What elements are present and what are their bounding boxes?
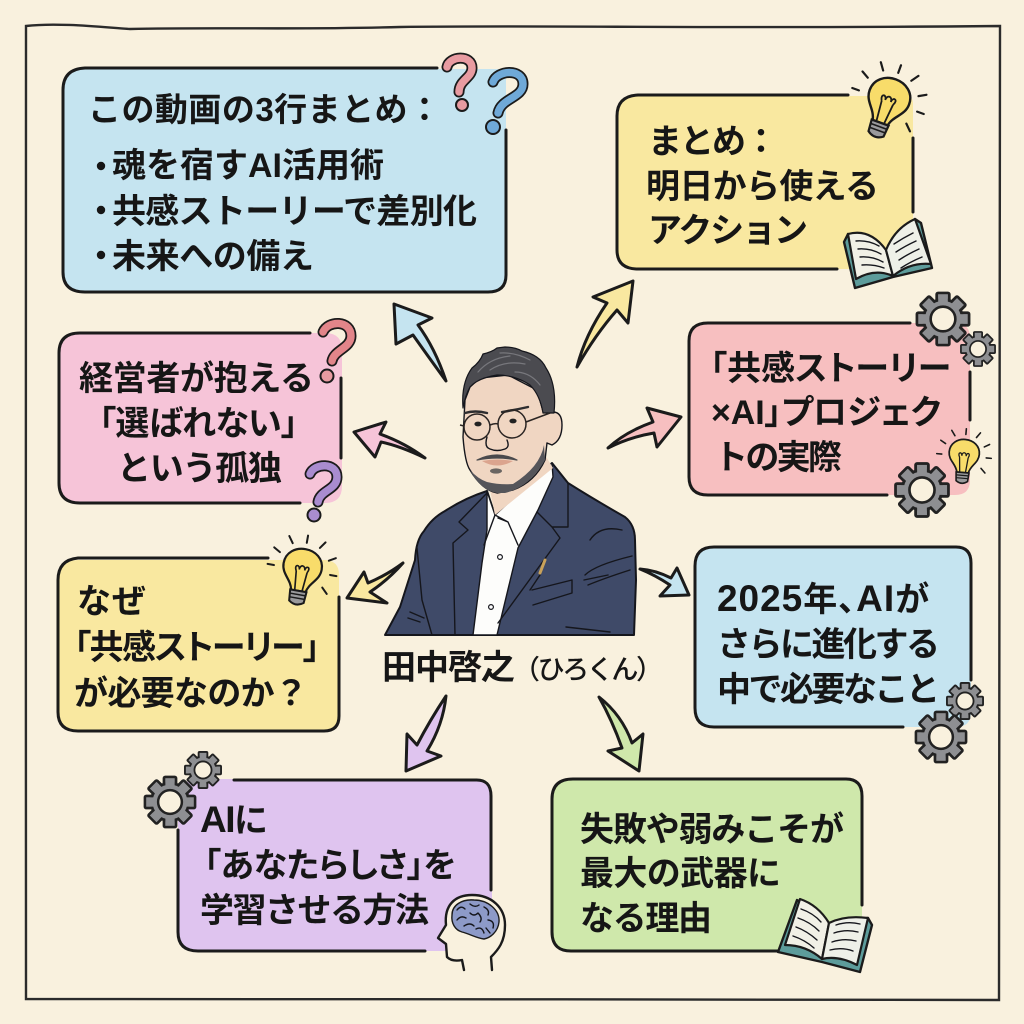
- text: lonely executives: という孤独: [117, 450, 282, 488]
- neck: [488, 455, 553, 515]
- text: project reality: [710, 350, 951, 477]
- panel: teaching AI your personality: [178, 779, 492, 951]
- arrow: to lonely executives: [354, 422, 425, 458]
- text: why empathy story: なぜ: [77, 583, 146, 621]
- text: teaching AI your personality: AIに: [200, 799, 268, 840]
- icon: blue question mark: [486, 72, 523, 134]
- icon: light bulb top right: [839, 52, 937, 150]
- arrow: to project panel: [608, 408, 681, 448]
- panel: project reality: [689, 323, 970, 495]
- text: 2025 AI evolution: さらに進化する: [717, 626, 940, 664]
- moustache: [477, 455, 517, 460]
- panel: action summary: [617, 95, 913, 269]
- list: three key points: 共感ストーリーで差別化: [112, 193, 477, 231]
- text: failure as a weapon: なる理由: [580, 900, 712, 938]
- face: [463, 375, 562, 493]
- icon: coral question mark: [447, 58, 472, 111]
- panel: failure as a weapon: [552, 779, 862, 952]
- text: lonely executives: 経営者が抱える: [79, 359, 314, 398]
- name label: [382, 649, 663, 687]
- arrow: to 2025 panel: [640, 568, 689, 596]
- text: project reality: トの実際: [714, 439, 842, 477]
- text: failure as a weapon: 最大の武器に: [580, 855, 781, 893]
- text: 2025 AI evolution: 中で必要なこと: [717, 671, 940, 709]
- name label: （ひろくん）: [513, 655, 663, 685]
- panel: lonely executives: [59, 333, 342, 503]
- text: action summary: まとめ：: [648, 123, 778, 161]
- jacket: [385, 463, 636, 635]
- jacket lapels and pocket: [408, 483, 632, 635]
- icon: light bulb on yellow panel: [262, 530, 342, 610]
- shirt: [473, 463, 553, 635]
- arrow: to teaching AI: [406, 696, 446, 771]
- shirt collar and buttons: [484, 515, 518, 545]
- text: why empathy story: 「共感ストーリー」: [74, 629, 320, 667]
- icon: gears upper right: [917, 293, 995, 366]
- text: 2025 AI evolution: 2025年、AIが: [717, 578, 929, 619]
- brows, eyes and nose: [465, 407, 528, 413]
- portrait: Tanaka: [385, 347, 636, 635]
- list: three key points: 魂を宿すAI活用術: [112, 147, 384, 185]
- icon: light bulb in pink panel: [934, 426, 994, 486]
- text: teaching AI your personality: 「あなたらしさ」を: [204, 847, 456, 885]
- panel: video summary: [63, 68, 506, 292]
- arrow: to failure panel: [599, 697, 643, 771]
- text: why empathy story: が必要なのか？: [74, 674, 308, 713]
- hair: [463, 347, 555, 413]
- text: teaching AI your personality: [200, 799, 456, 930]
- icon: open book top right: [844, 219, 932, 288]
- name label: 田中啓之: [382, 649, 515, 687]
- text: action summary: [646, 123, 879, 250]
- arrow: to action summary: [577, 281, 633, 367]
- text: lonely executives: 「選ばれない」: [99, 405, 298, 443]
- icon: gear lower right of pink panel: [896, 464, 948, 516]
- arrow: to video summary: [394, 304, 446, 381]
- beard: [470, 445, 545, 493]
- icon: coral question mark on pink panel: [320, 323, 351, 382]
- icon: head with brain: [438, 895, 505, 970]
- text: why empathy story: [74, 583, 320, 713]
- icon: gears on blue panel: [916, 683, 983, 762]
- goatee: [490, 468, 502, 474]
- text: project reality: ×AI」プロジェク: [711, 394, 941, 432]
- panel: why empathy story: [58, 558, 339, 731]
- glasses: [460, 410, 550, 440]
- icon: purple question mark: [308, 466, 337, 522]
- list: three key points: [97, 147, 477, 276]
- text: 2025 AI evolution: [717, 578, 940, 709]
- text: action summary: アクション: [648, 212, 808, 250]
- list: three key points: 未来への備え: [112, 238, 314, 276]
- text: failure as a weapon: [580, 810, 844, 938]
- arrow: to why empathy story: [347, 563, 403, 603]
- icon: gears on purple panel: [145, 752, 221, 827]
- text: failure as a weapon: 失敗や弱みこそが: [580, 810, 844, 849]
- text: project reality: 「共感ストーリー: [710, 350, 951, 388]
- hair highlights: [478, 353, 540, 385]
- text: lonely executives: [79, 359, 314, 488]
- heading: video summary: この動画の3行まとめ：: [88, 91, 441, 128]
- text: teaching AI your personality: 学習させる方法: [200, 892, 429, 930]
- icon: open book on green panel: [778, 899, 872, 972]
- text: action summary: 明日から使える: [646, 168, 879, 206]
- lips: [482, 460, 513, 466]
- panel: 2025 AI evolution: [695, 547, 971, 727]
